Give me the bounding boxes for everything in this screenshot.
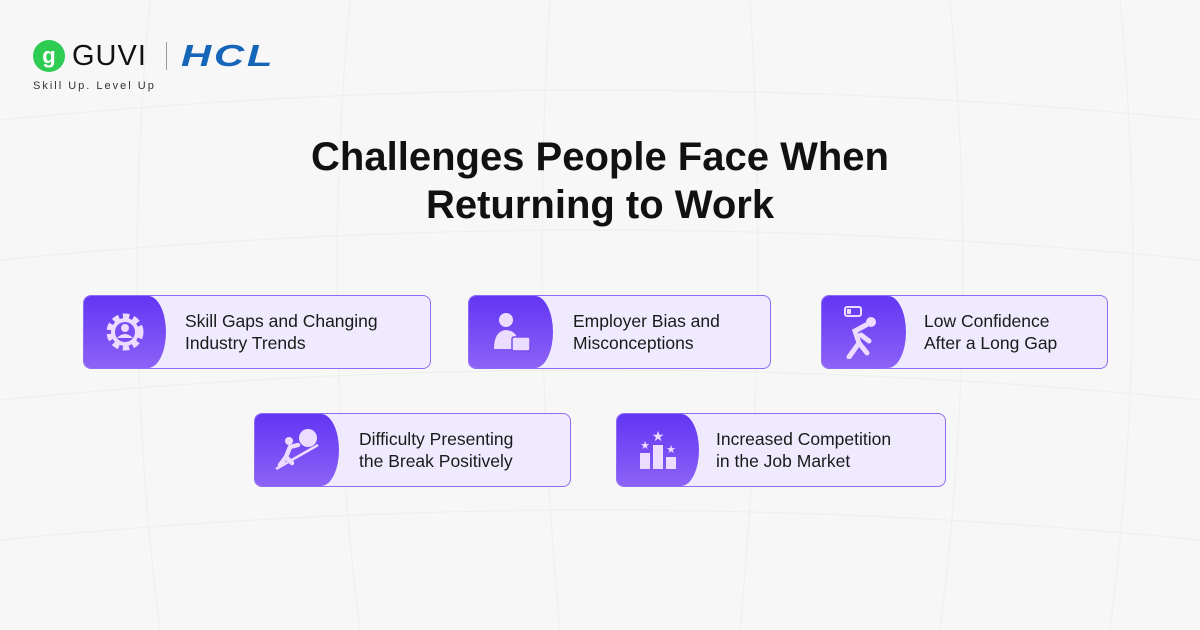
card 3: After a Long Gap [924, 333, 1057, 353]
title: Challenges People Face When [311, 135, 889, 179]
card 1: Skill Gaps and Changing [185, 311, 378, 331]
card 2 [468, 295, 771, 369]
logo: Skill Up. Level Up [33, 80, 156, 92]
logo [33, 38, 275, 92]
card 5: ★ [666, 444, 676, 456]
logo: HCL [181, 38, 275, 73]
title [311, 135, 889, 227]
card 5 [616, 413, 946, 487]
card 5: Increased Competition [716, 429, 891, 449]
card 4: the Break Positively [359, 451, 513, 471]
logo: g [42, 43, 56, 68]
card 4 [254, 413, 571, 487]
logo: GUVI [72, 40, 147, 72]
card 5: in the Job Market [716, 451, 850, 471]
card 1: Industry Trends [185, 333, 306, 353]
card 4: Difficulty Presenting [359, 429, 513, 449]
card 3: Low Confidence [924, 311, 1050, 331]
card 5: ★ [640, 440, 650, 452]
card 3 [821, 295, 1108, 369]
card 2: Misconceptions [573, 333, 694, 353]
title: Returning to Work [426, 183, 774, 227]
card 5: ★ [652, 428, 664, 444]
card 2: Employer Bias and [573, 311, 720, 331]
card 1 [83, 295, 431, 369]
